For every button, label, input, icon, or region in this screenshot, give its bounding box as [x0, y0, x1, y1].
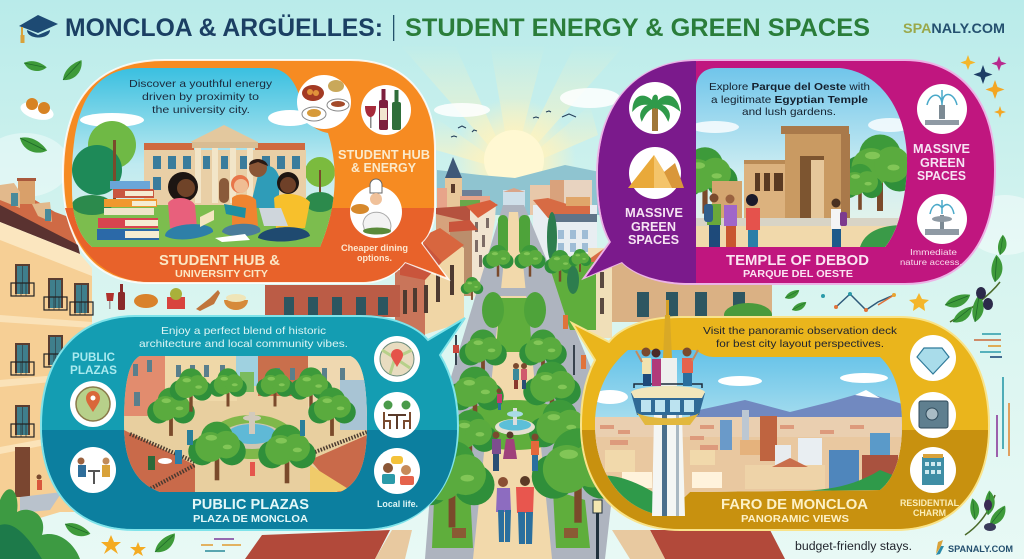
brand top: SPANALY.COM: [903, 21, 1005, 36]
decor: food row: [106, 284, 248, 311]
text: intro: the university city.: [152, 104, 250, 116]
subheading: panoramic views: PANORAMIC VIEWS: [741, 513, 849, 525]
label: residential charm: RESIDENTIAL: [900, 498, 959, 508]
left buildings strip: [265, 228, 464, 336]
heading: student energy: STUDENT ENERGY & GREEN SPACES: [405, 14, 870, 42]
birds: [451, 111, 576, 137]
decor: olive branch top: [944, 235, 1010, 325]
label: massive green spaces right: GREEN: [920, 156, 965, 170]
icon: chef: [350, 179, 402, 238]
label: student hub & energy: & ENERGY: [351, 161, 417, 175]
caption: cheaper dining: [341, 243, 408, 263]
icon: diamond: [910, 335, 956, 381]
scene: temple of debod: [696, 68, 908, 247]
label: residential charm: [900, 498, 959, 518]
subheading: parque del oeste: PARQUE DEL OESTE: [743, 268, 853, 280]
scene: university: [72, 68, 335, 247]
scene: panoramic view: [590, 345, 905, 520]
label: public plazas: [70, 350, 117, 377]
plaza lawn: [457, 400, 573, 450]
decor: side lines: [974, 334, 1009, 457]
lamp posts and walkers: [453, 315, 586, 375]
fountain: [495, 408, 535, 435]
icon: map pin: [70, 381, 116, 427]
decor: olive branch bottom: [965, 490, 1011, 535]
sun rays: [400, 45, 625, 172]
icon: wine: [361, 85, 411, 135]
text: intro: [703, 325, 898, 350]
scene: plaza: [120, 350, 370, 495]
caption: budget-friendly stays: budget-friendly stays.: [795, 541, 912, 553]
distant buildings center right: [503, 180, 597, 260]
label: massive green spaces left: MASSIVE: [625, 206, 683, 220]
clouds in sky: [0, 88, 1024, 255]
panel: massive green spaces: [584, 60, 995, 284]
decor: line chart and star: [784, 290, 929, 312]
text: intro: Visit the panoramic observation deck: [703, 325, 898, 337]
label: student hub & energy: STUDENT HUB: [338, 148, 430, 162]
bubble: [584, 60, 995, 284]
icon: graduation cap: [19, 15, 58, 43]
bubble: [41, 316, 465, 530]
icon: pyramid: [628, 147, 684, 199]
label: massive green spaces left: [625, 206, 683, 247]
label: massive green spaces right: [913, 142, 970, 183]
text: intro: Enjoy a perfect blend of historic: [161, 325, 326, 337]
heading: public plazas: PUBLIC PLAZAS: [192, 496, 309, 513]
decor: floating leaves and dish: [18, 56, 87, 160]
tourists: [704, 194, 847, 247]
label: public plazas: PLAZAS: [70, 363, 117, 377]
text: intro: Explore Parque del Oeste with: [709, 81, 870, 93]
label: student hub & energy: [338, 148, 430, 175]
icon: fountain two: [917, 194, 967, 244]
caption: immediate nature access: [900, 247, 962, 267]
text: intro: Discover a youthful energy: [129, 78, 273, 90]
label: massive green spaces right: MASSIVE: [913, 142, 970, 156]
city street illustration: [265, 157, 772, 559]
text: intro: [139, 325, 348, 350]
heading: faro de moncloa: FARO DE MONCLOA: [721, 496, 868, 513]
icon: cafe table: [70, 447, 116, 493]
icon: terrace: [374, 392, 420, 438]
sun: [452, 98, 576, 222]
icon: palm: [629, 82, 681, 134]
caption: cheaper dining: options.: [357, 253, 392, 263]
icon: map: [374, 336, 420, 382]
text: intro: [709, 81, 870, 118]
crossing: [499, 288, 529, 296]
caption: immediate nature access: Immediate: [910, 247, 957, 257]
panel: student hub: [60, 60, 448, 283]
label: massive green spaces left: GREEN: [631, 220, 676, 234]
left building: [0, 178, 93, 530]
panel: public plazas: [41, 316, 465, 530]
bubble: [572, 317, 989, 530]
title: [19, 13, 1005, 43]
subheading: plaza de moncloa: PLAZA DE MONCLOA: [193, 513, 308, 525]
icon: hotel: [910, 447, 956, 493]
bottom-left bush: [0, 489, 80, 559]
bubble: [63, 60, 448, 283]
street lamp: [593, 500, 602, 559]
decor: bottom stars and leaves: [63, 517, 241, 556]
text: intro: a legitimate Egyptian Temple: [711, 94, 868, 106]
distant hills: [437, 165, 600, 215]
bottom roofs: [245, 530, 785, 559]
pedestrians: [492, 363, 539, 544]
students: [165, 159, 310, 242]
icon: neighbours chat: [374, 448, 420, 494]
text: intro: for best city layout perspectives.: [716, 338, 884, 350]
distant buildings left: [436, 157, 498, 300]
heading: moncloa: MONCLOA & ARGÜELLES:: [65, 13, 383, 42]
right tan building: [585, 243, 772, 338]
right gardens: [548, 262, 596, 330]
road: [425, 205, 615, 559]
panel: faro de moncloa: [572, 300, 989, 530]
label: massive green spaces right: SPACES: [917, 169, 966, 183]
street trees: [410, 212, 624, 538]
caption: local life: Local life.: [377, 499, 418, 509]
caption: immediate nature access: nature access.: [900, 257, 962, 267]
text: intro: [129, 78, 273, 116]
text: intro: and lush gardens.: [742, 106, 836, 118]
subheading: university city: UNIVERSITY CITY: [175, 268, 268, 280]
caption: cheaper dining: Cheaper dining: [341, 243, 408, 253]
brand footer: SPANALY.COM: [948, 544, 1013, 555]
icon: tapas: [297, 75, 351, 129]
heading: temple of debod: TEMPLE OF DEBOD: [726, 252, 869, 269]
label: residential charm: CHARM: [913, 508, 946, 518]
heading: student hub: STUDENT HUB &: [159, 252, 280, 269]
text: intro: driven by proximity to: [142, 91, 259, 103]
promenade: [473, 212, 552, 559]
icon: safe: [910, 392, 956, 438]
tower: [631, 300, 705, 516]
label: public plazas: PUBLIC: [72, 350, 115, 364]
label: massive green spaces left: SPACES: [628, 233, 679, 247]
decor: stars: [960, 55, 1006, 118]
text: intro: architecture and local community vibes.: [139, 338, 348, 350]
brand footer: [936, 540, 1013, 555]
icon: fountain one: [917, 84, 967, 134]
